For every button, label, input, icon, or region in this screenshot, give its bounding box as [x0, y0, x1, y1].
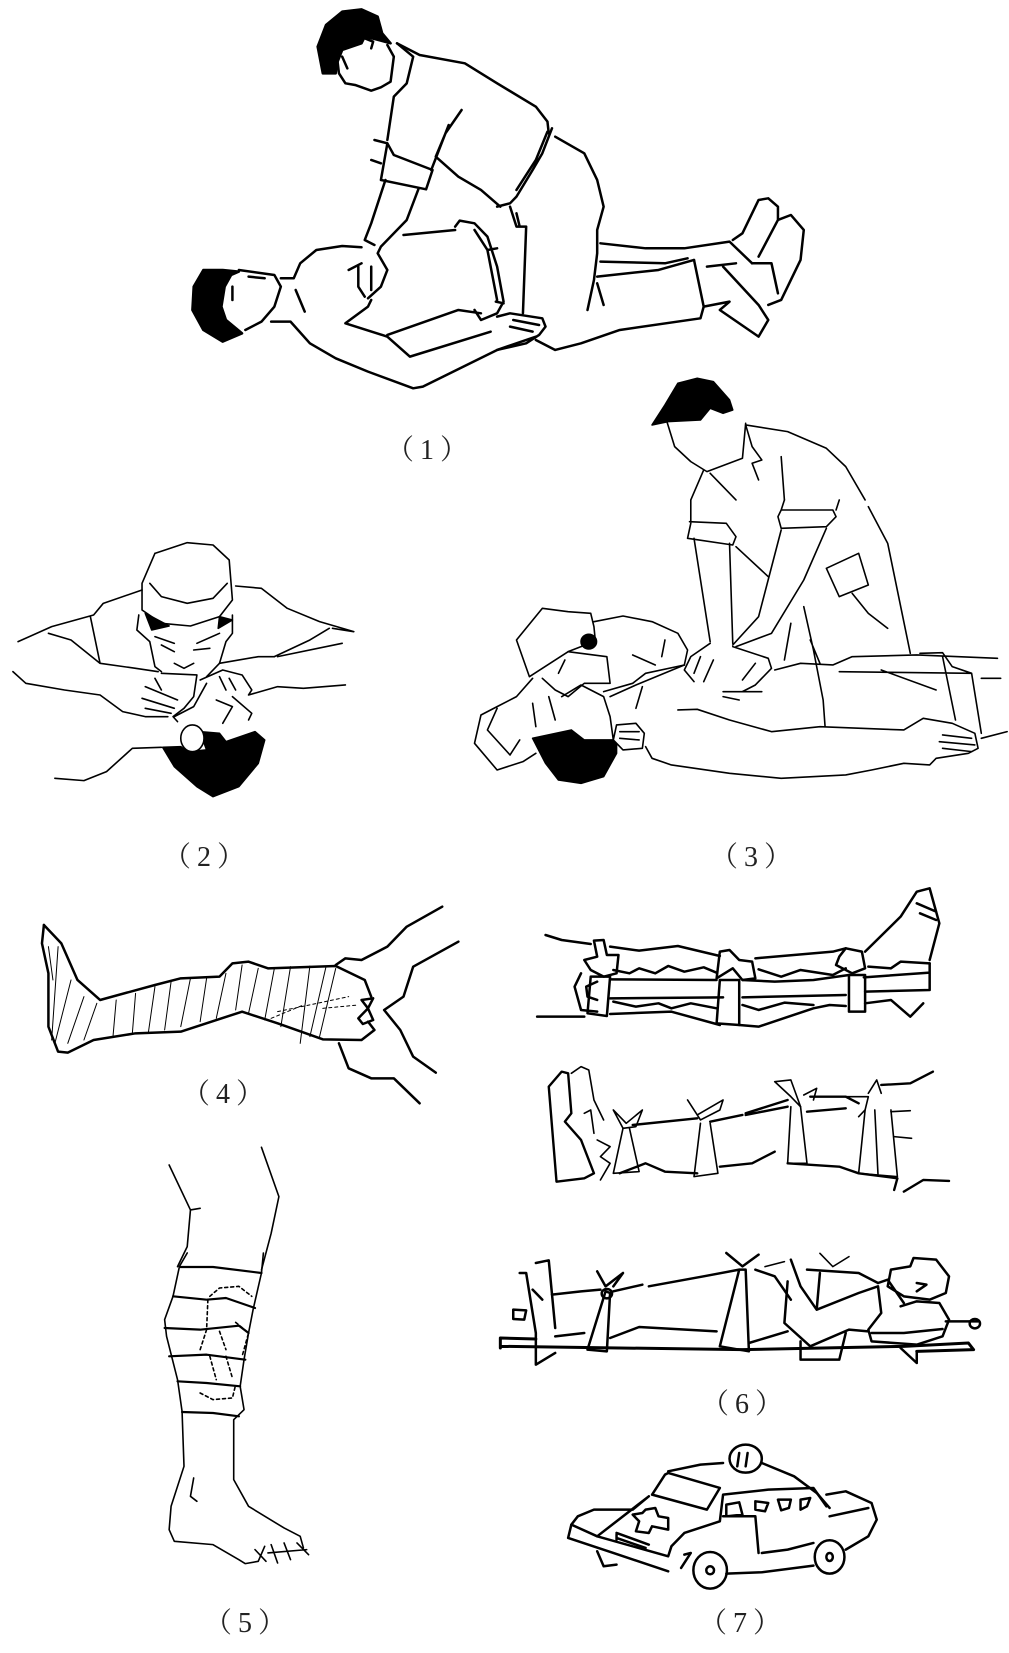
splinted leg with boot	[549, 1067, 949, 1267]
upper leg	[169, 1147, 279, 1270]
caption (6): （6）	[701, 1388, 789, 1420]
caption (7): （7）	[699, 1607, 787, 1639]
panel 2: mouth-to-mouth resuscitation	[13, 543, 354, 873]
panel 3: cardiac compression with rescue breaths	[475, 378, 1007, 873]
panel 6: splinting and stretcher transport	[500, 888, 980, 1420]
standing rescuer arms and coat	[684, 500, 910, 727]
caption (1): （1）	[386, 434, 474, 466]
panel 7: ambulance	[568, 1445, 877, 1639]
panel 5: bandaged lower leg and foot	[165, 1147, 309, 1639]
caption (4): （4）	[182, 1078, 270, 1110]
bandage bands	[165, 1267, 261, 1416]
standing rescuer head and shoulders	[652, 378, 865, 500]
caption (2): （2）	[163, 841, 251, 873]
splinted leg	[537, 888, 939, 1027]
panel 1: checking a casualty lying on the ground	[192, 9, 804, 466]
casualty on stretcher	[500, 1253, 980, 1365]
rescuer with cap	[13, 543, 354, 722]
panel 4: bandaging the leg	[42, 907, 458, 1110]
caption (3): （3）	[710, 841, 798, 873]
casualty head tilted back	[55, 683, 265, 797]
rescuer kneeling	[318, 9, 604, 313]
casualty lying on back	[192, 198, 804, 388]
lower leg and foot	[165, 1253, 309, 1564]
caption (5): （5）	[204, 1607, 292, 1639]
bandaged leg	[42, 925, 374, 1053]
helper's hands holding the leg	[336, 907, 458, 1103]
ambulance car	[568, 1445, 877, 1589]
casualty lying flat with nurse at head	[475, 608, 1007, 783]
